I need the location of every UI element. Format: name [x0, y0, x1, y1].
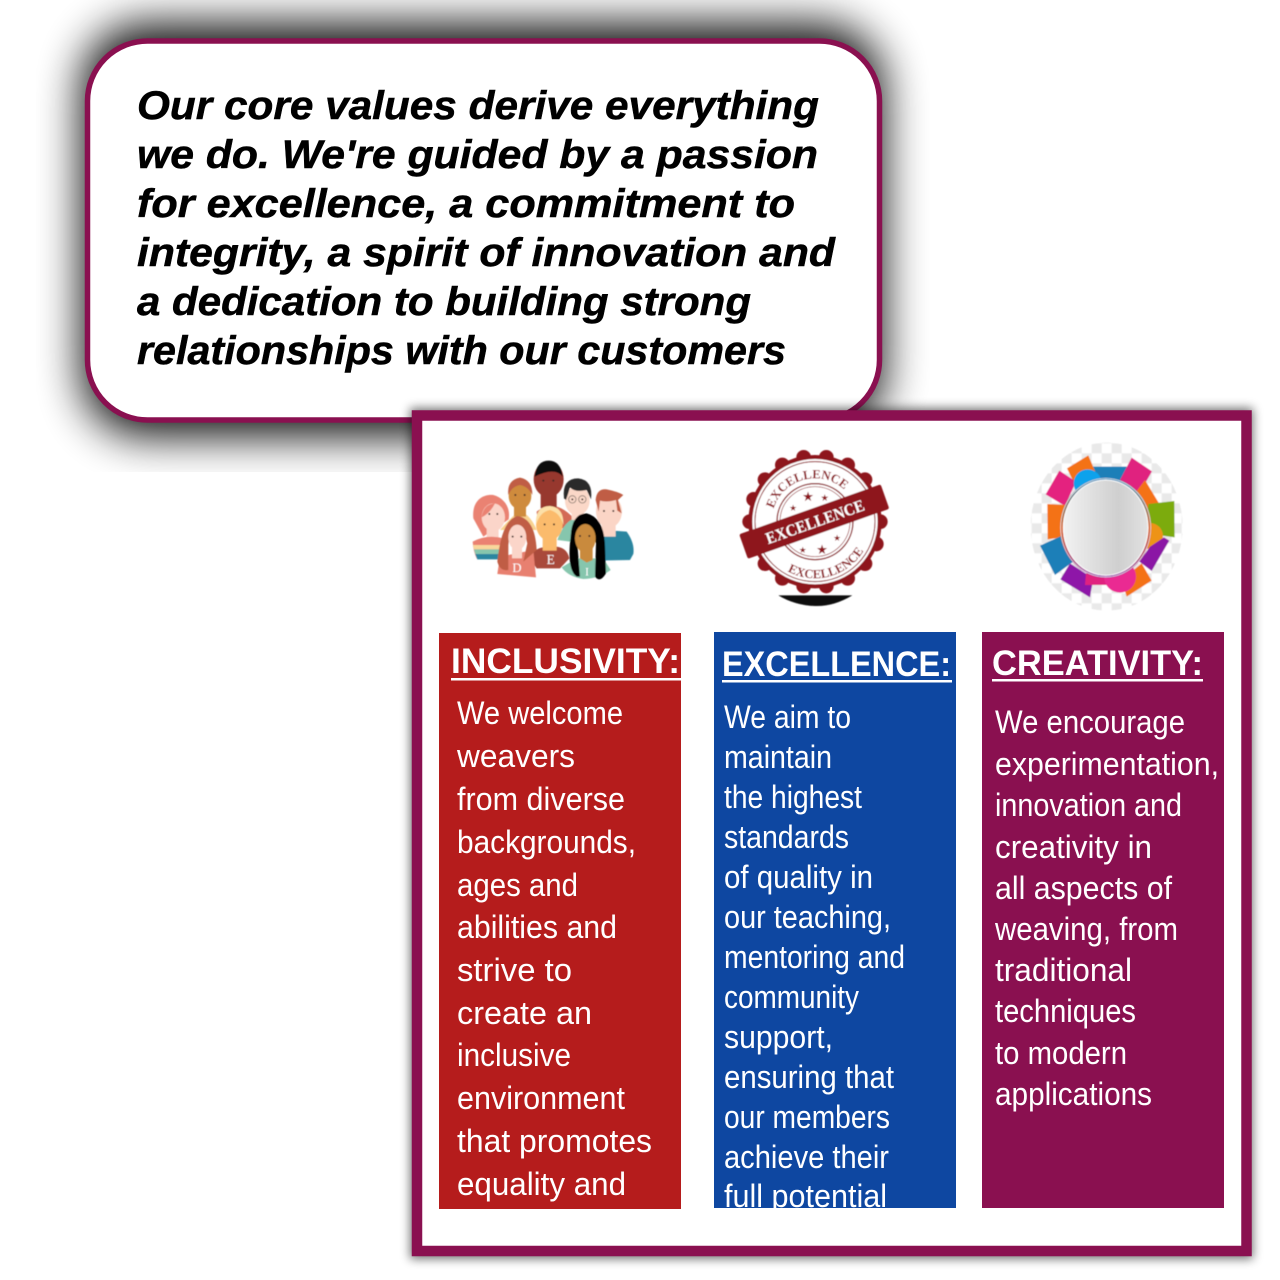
excellence body text: standards: [724, 819, 849, 855]
stamp banner: [739, 484, 889, 559]
intro statement text: a dedication to building strong: [137, 280, 751, 324]
intro callout card: [88, 41, 880, 420]
inclusivity body text: backgrounds,: [457, 824, 636, 860]
stars: ★: [833, 534, 841, 543]
excellence body text: the highest: [724, 779, 862, 815]
values panel: [402, 400, 1260, 1266]
creativity body text: techniques: [995, 993, 1136, 1029]
creativity body text: weaving, from: [994, 911, 1178, 947]
excellence body text: ensuring that: [724, 1059, 894, 1095]
excellence body text: mentoring and: [724, 939, 905, 975]
card drop shadow: [82, 24, 883, 436]
inclusivity body text: We welcome: [457, 695, 623, 731]
intro statement text: Our core values derive everything: [137, 84, 819, 128]
excellence body text: our members: [724, 1099, 890, 1135]
icon: diverse group of people: I: [585, 566, 589, 578]
heading: inclusivity: INCLUSIVITY:: [451, 642, 680, 681]
excellence body text: support,: [724, 1019, 833, 1055]
icon: colourful creativity wheel: [1027, 440, 1187, 613]
intro statement text: we do. We're guided by a passion: [137, 133, 818, 177]
excellence body text: We aim to: [724, 699, 851, 735]
creativity body text: to modern: [995, 1035, 1127, 1071]
stamp banner: EXCELLENCE: [763, 496, 867, 548]
inclusivity body text: inclusive: [457, 1037, 571, 1073]
excellence body text: [724, 699, 905, 1214]
inclusivity body text: equality and: [457, 1166, 626, 1202]
heading: creativity: CREATIVITY:: [992, 644, 1203, 683]
inclusivity body text: ages and: [457, 867, 578, 903]
creativity body text: [994, 704, 1219, 1112]
stamp arc lettering: [765, 469, 864, 579]
inclusivity body text: strive to: [457, 952, 572, 988]
panel: excellence: [714, 632, 956, 1214]
intro statement text: integrity, a spirit of innovation and: [137, 231, 837, 275]
stamp arc lettering: EXCELLENCE: [787, 546, 864, 579]
inclusivity body text: create an: [457, 995, 592, 1031]
creativity body text: innovation and: [995, 787, 1182, 823]
excellence body text: achieve their: [724, 1139, 889, 1175]
creativity body text: all aspects of: [995, 870, 1172, 906]
icon: diverse group of people: [473, 461, 634, 579]
intro statement text: [137, 84, 837, 373]
panel: creativity: [982, 632, 1224, 1208]
inclusivity body text: from diverse: [457, 781, 625, 817]
excellence body text: full potential: [724, 1178, 887, 1214]
heading: excellence: EXCELLENCE:: [722, 645, 951, 684]
excellence body text: of quality in: [724, 859, 873, 895]
creativity body text: We encourage: [995, 704, 1185, 740]
icon: diverse group of people: D: [512, 561, 522, 575]
inclusivity body text: that promotes: [457, 1123, 652, 1159]
stars: ★: [789, 504, 797, 513]
excellence body text: our teaching,: [724, 899, 891, 935]
inclusivity body text: [456, 695, 652, 1202]
excellence body text: maintain: [724, 739, 832, 775]
creativity body text: applications: [995, 1076, 1152, 1112]
stars: ★: [817, 544, 827, 556]
inclusivity body text: environment: [457, 1080, 625, 1116]
intro statement text: relationships with our customers: [137, 329, 786, 373]
icon: diverse group of people: E: [547, 552, 555, 567]
intro statement text: for excellence, a commitment to: [137, 182, 795, 226]
stars: ★: [821, 494, 829, 503]
creativity body text: creativity in: [995, 829, 1152, 865]
stamp arc lettering: EXCELLENCE: [765, 469, 849, 509]
panel: inclusivity: [439, 633, 681, 1209]
stars: ★: [798, 546, 806, 555]
inclusivity body text: weavers: [456, 738, 575, 774]
stars: [789, 492, 841, 556]
inclusivity body text: abilities and: [457, 909, 617, 945]
excellence body text: community: [724, 979, 859, 1015]
stars: ★: [803, 492, 813, 504]
creativity body text: traditional: [995, 952, 1132, 988]
creativity body text: experimentation,: [995, 746, 1219, 782]
icon: excellence stamp: [739, 449, 890, 607]
